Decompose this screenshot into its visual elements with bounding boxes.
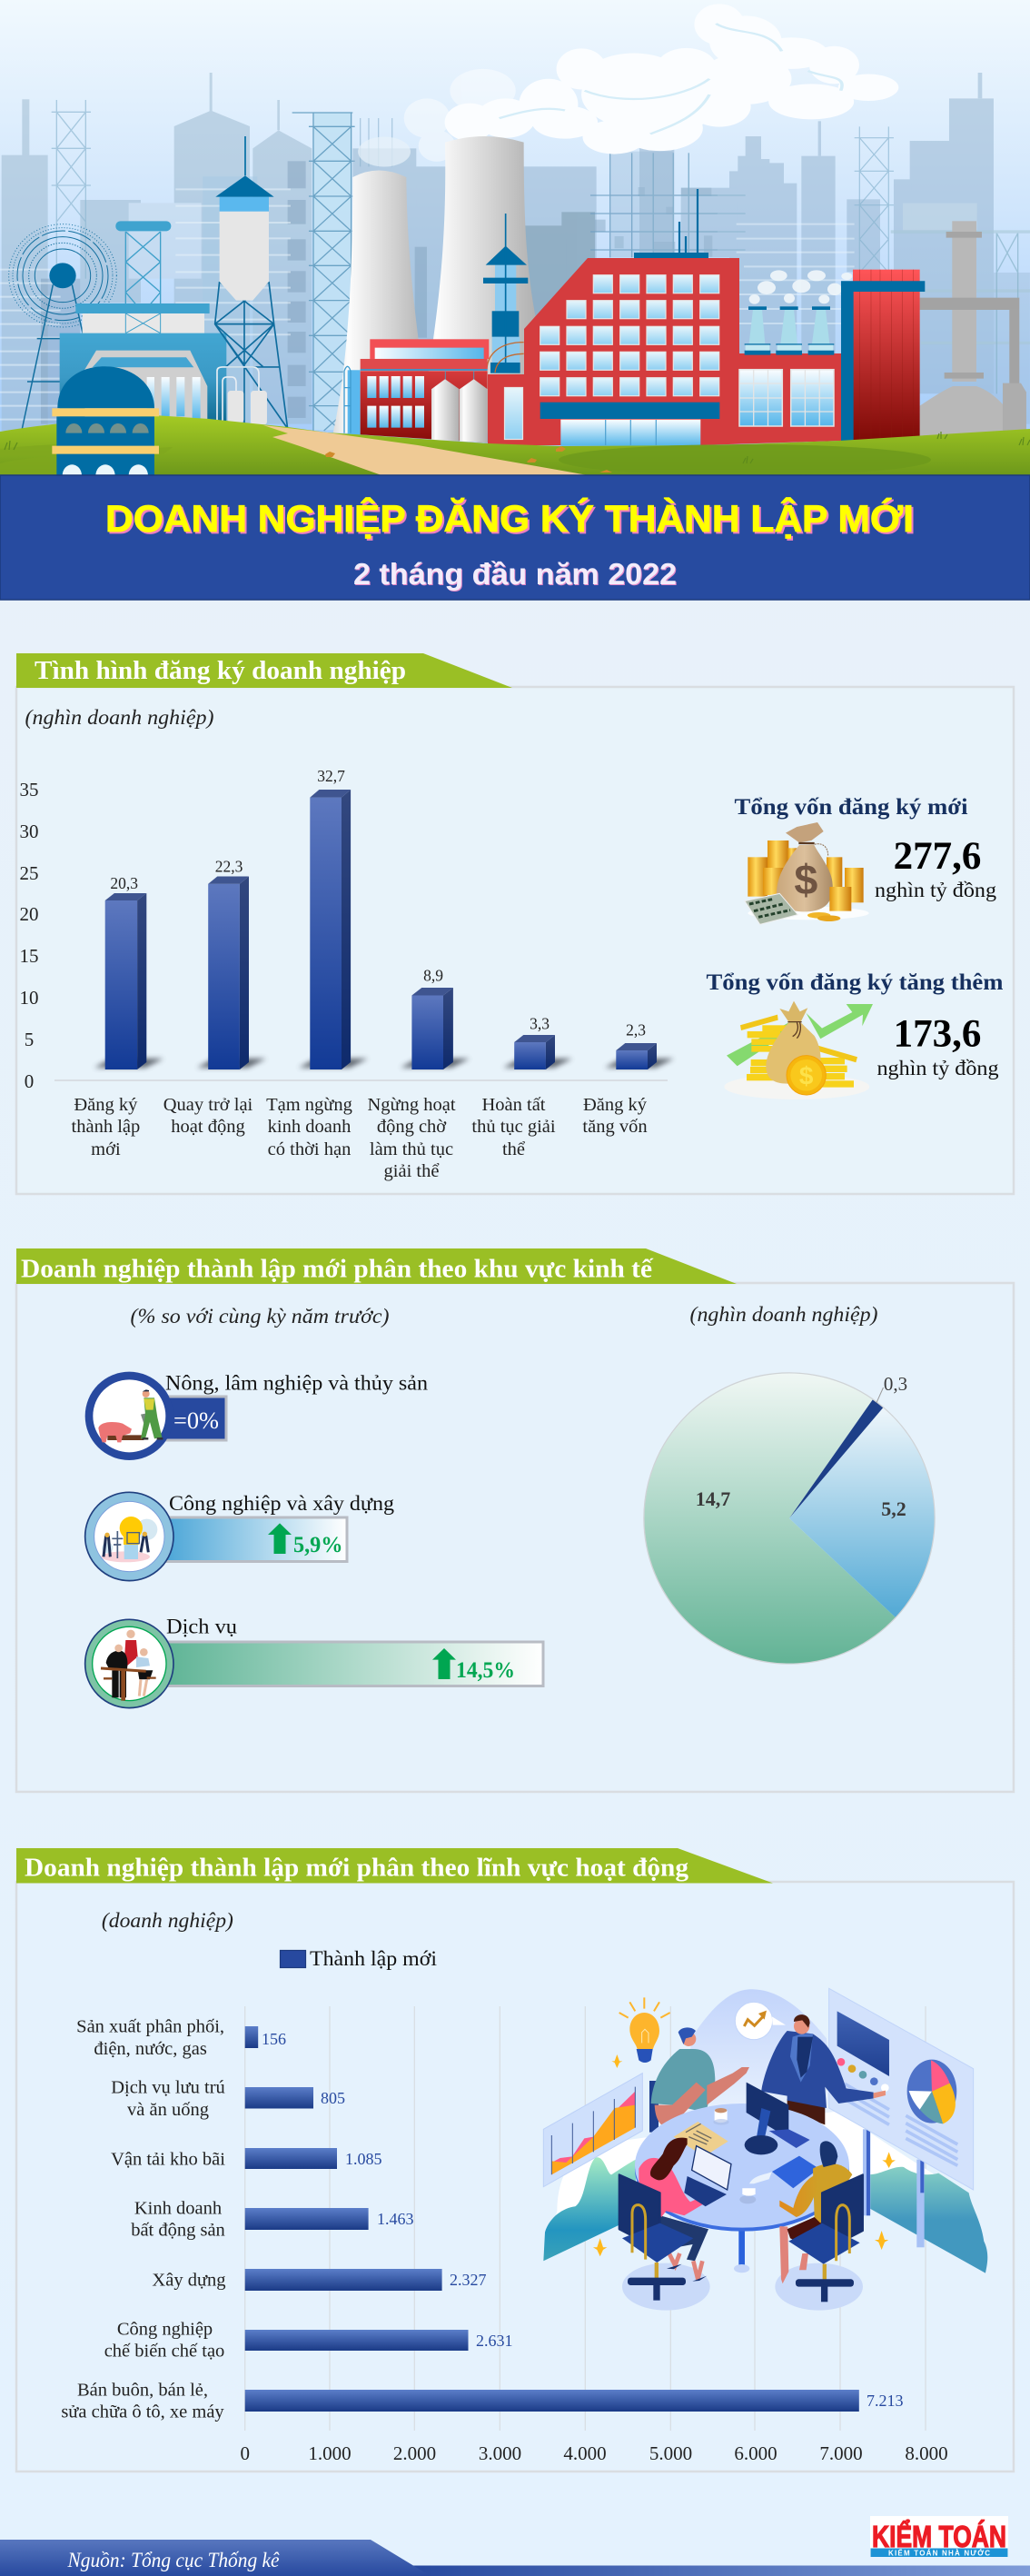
heading bbox=[16, 653, 512, 688]
slice: industry 5,2 bbox=[789, 1407, 935, 1617]
gray plant bbox=[920, 221, 1026, 438]
row: Dịch vụ lưu trú: 805 bbox=[321, 2089, 345, 2107]
man in blue suit bbox=[761, 2014, 886, 2124]
panel: by economic sector bbox=[16, 1248, 1014, 1792]
axis labels: 1.000 bbox=[308, 2442, 352, 2464]
row: Xây dựng: 2.327 bbox=[450, 2271, 487, 2289]
icon: business meeting bbox=[85, 1619, 173, 1708]
row: Sản xuất phân phối: Sản xuất phân phối, bbox=[76, 2017, 224, 2037]
cooling towers bbox=[333, 136, 539, 433]
note: percent comparison: (% so với cùng kỳ năm trước) bbox=[131, 1305, 389, 1328]
row: Bán buôn, bán lẻ: Bán buôn, bán lẻ, bbox=[77, 2381, 208, 2401]
row: industry and construction bbox=[85, 1492, 395, 1581]
unit: nghìn tỷ đồng bbox=[875, 879, 997, 901]
bar: Quay trở lại hoạt động: 22,3 bbox=[215, 858, 243, 876]
axis labels: 6.000 bbox=[734, 2442, 777, 2464]
row: Bán buôn, bán lẻ: 7.213 bbox=[867, 2392, 903, 2410]
left plant: tower, tank, building bbox=[9, 136, 288, 475]
small chimneys with smoke and right red tower bbox=[745, 221, 1026, 441]
category labels: tăng vốn bbox=[582, 1117, 648, 1137]
footer bbox=[0, 2516, 1030, 2576]
axis labels: 0 bbox=[240, 2442, 250, 2464]
unit note: (nghìn doanh nghiệp) bbox=[25, 706, 214, 729]
windows grid bbox=[505, 275, 719, 440]
heading: Tình hình đăng ký doanh nghiệp bbox=[35, 656, 406, 685]
domed observatory bbox=[52, 366, 159, 475]
row: Kinh doanh bất động sản bbox=[131, 2199, 414, 2241]
background skyline right bbox=[639, 73, 1030, 424]
water tower bbox=[215, 136, 288, 429]
lighthouse bbox=[483, 214, 528, 373]
y axis: 35 bbox=[20, 779, 38, 801]
illustration: business team meeting bbox=[543, 1988, 987, 2311]
stat: new registered capital: Tổng vốn đăng ký mới bbox=[734, 795, 968, 820]
mountains bbox=[543, 2157, 636, 2261]
row: Công nghiệp chế biến chế tạo: chế biến chế tạo bbox=[104, 2341, 224, 2361]
red plant, chimney and main building bbox=[344, 214, 528, 443]
y axis: 10 bbox=[20, 987, 38, 1009]
bar: Tạm ngừng kinh doanh bbox=[310, 767, 351, 1069]
smoke clouds bbox=[358, 4, 898, 166]
row: Công nghiệp chế biến chế tạo: 2.631 bbox=[476, 2332, 512, 2350]
bar: Ngừng hoạt động: 8,9 bbox=[423, 967, 443, 985]
value labels: 0,3 bbox=[884, 1373, 907, 1395]
woman in yellow and chair bbox=[775, 2141, 863, 2311]
y axis: 20 bbox=[20, 903, 38, 925]
category labels: Đăng ký bbox=[583, 1095, 648, 1115]
bar: Tạm ngừng kinh doanh: 32,7 bbox=[317, 767, 345, 785]
row: Xây dựng: Xây dựng bbox=[152, 2270, 226, 2290]
panel: by field of activity bbox=[16, 1848, 1014, 2472]
axis labels: 4.000 bbox=[563, 2442, 607, 2464]
stat: additional registered capital: Tổng vốn đăng ký tăng thêm bbox=[707, 970, 1004, 995]
category labels: mới bbox=[91, 1139, 121, 1159]
icon: money bag with coins: $ bbox=[794, 856, 817, 903]
small lattice bbox=[115, 221, 171, 333]
bar chart: registrations bbox=[20, 767, 674, 1181]
row: services bbox=[85, 1616, 543, 1708]
category labels: thể bbox=[502, 1139, 526, 1159]
bar: Quay trở lại hoạt động bbox=[208, 858, 249, 1069]
woman with laptop and chair bbox=[619, 2138, 731, 2311]
row: industry and construction: Công nghiệp và xây dựng bbox=[169, 1492, 395, 1515]
light bulb bbox=[619, 1997, 670, 2063]
row: agriculture: =0% bbox=[173, 1407, 219, 1434]
hero illustration: industrial skyline bbox=[0, 0, 1030, 475]
main title: DOANH NGHIỆP ĐĂNG KÝ THÀNH LẬP MỚI bbox=[105, 496, 914, 540]
unit note: (doanh nghiệp) bbox=[102, 1909, 233, 1932]
bar: Ngừng hoạt động bbox=[411, 967, 453, 1069]
background skyline centre bbox=[352, 118, 718, 424]
icon: up arrow bbox=[432, 1648, 456, 1679]
y axis: 5 bbox=[25, 1029, 34, 1050]
category labels: Tạm ngừng bbox=[266, 1095, 352, 1115]
axis labels: 2.000 bbox=[393, 2442, 436, 2464]
axis labels: 3.000 bbox=[479, 2442, 521, 2464]
category labels bbox=[72, 1095, 648, 1181]
axis labels: 5.000 bbox=[649, 2442, 692, 2464]
value labels: 14,7 bbox=[696, 1487, 730, 1510]
note: thousand firms: (nghìn doanh nghiệp) bbox=[690, 1303, 877, 1326]
category labels: giải thể bbox=[384, 1161, 440, 1181]
row: Sản xuất phân phối: điện, nước, gas bbox=[94, 2039, 207, 2059]
row: Bán buôn, bán lẻ bbox=[61, 2381, 903, 2422]
bar: Hoàn tất thủ tục giải thể: 3,3 bbox=[530, 1014, 550, 1032]
left red block bbox=[344, 339, 489, 443]
background skyline left bbox=[0, 73, 355, 431]
row: Kinh doanh bất động sản: Kinh doanh bbox=[134, 2199, 222, 2219]
stat: new registered capital bbox=[734, 795, 997, 924]
source ribbon bbox=[0, 2540, 431, 2576]
bar: Đăng ký tăng vốn bbox=[616, 1021, 657, 1069]
value: 277,6 bbox=[894, 835, 981, 878]
category labels: thủ tục giải bbox=[471, 1117, 556, 1137]
category labels: Đăng ký bbox=[74, 1095, 138, 1115]
icon: money bag with coins bbox=[745, 822, 869, 924]
speech bubble bbox=[735, 2002, 786, 2040]
slice: services 14,7 bbox=[645, 1374, 896, 1664]
value labels: 5,2 bbox=[881, 1497, 906, 1520]
bar: Đăng ký thành lập mới: 20,3 bbox=[110, 874, 138, 892]
row: services: 14,5% bbox=[456, 1658, 515, 1683]
row: Dịch vụ lưu trú: Dịch vụ lưu trú bbox=[111, 2077, 225, 2097]
panel: business registration bbox=[16, 653, 1014, 1194]
source text: Nguồn: Tổng cục Thống kê bbox=[67, 2549, 280, 2571]
bar shadows bbox=[94, 1059, 674, 1068]
stars bbox=[593, 2054, 896, 2256]
row: Công nghiệp chế biến chế tạo: Công nghiệp bbox=[117, 2319, 213, 2339]
category labels: kinh doanh bbox=[268, 1117, 351, 1137]
category labels: thành lập bbox=[72, 1117, 140, 1137]
main blue hall bbox=[60, 333, 226, 423]
presentation board bbox=[829, 1988, 974, 2247]
row: agriculture: Nông, lâm nghiệp và thủy sản bbox=[165, 1372, 429, 1394]
title banner bbox=[0, 475, 1030, 600]
row: Vận tải kho bãi bbox=[111, 2148, 381, 2170]
main red building bbox=[488, 189, 841, 446]
horizontal bar chart bbox=[61, 2006, 948, 2464]
y axis: 25 bbox=[20, 862, 38, 884]
tanks bbox=[217, 367, 267, 424]
logo: KIỂM TOÁN NHÀ NƯỚC bbox=[888, 2550, 990, 2557]
row: Dịch vụ lưu trú bbox=[111, 2077, 345, 2120]
category labels: làm thủ tục bbox=[370, 1139, 453, 1159]
axis labels bbox=[240, 2442, 948, 2464]
axis labels: 7.000 bbox=[819, 2442, 863, 2464]
radio mast bbox=[9, 224, 116, 475]
icon: up arrow bbox=[268, 1523, 292, 1554]
man in teal shirt bbox=[649, 2027, 749, 2133]
row: Sản xuất phân phối bbox=[76, 2017, 286, 2059]
category labels: Quay trở lại bbox=[163, 1095, 253, 1115]
category labels: Ngừng hoạt bbox=[367, 1095, 456, 1115]
row: services: Dịch vụ bbox=[166, 1616, 238, 1637]
mini pie bbox=[907, 2060, 956, 2123]
stat: additional registered capital bbox=[707, 970, 1004, 1099]
category labels: Hoàn tất bbox=[481, 1095, 546, 1115]
row: Kinh doanh bất động sản: 1.463 bbox=[377, 2210, 414, 2228]
y axis: 0 bbox=[25, 1070, 34, 1092]
icon: rising money bag: $ bbox=[799, 1061, 814, 1089]
bar: Hoàn tất thủ tục giải thể bbox=[514, 1014, 555, 1069]
round table bbox=[635, 2104, 849, 2273]
row: Vận tải kho bãi: Vận tải kho bãi bbox=[111, 2150, 225, 2170]
footer thin bar bbox=[413, 2566, 1030, 2576]
pie chart bbox=[644, 1373, 935, 1664]
category labels: hoạt động bbox=[171, 1117, 245, 1137]
value labels bbox=[696, 1373, 907, 1520]
icon: farmer and pig bbox=[85, 1372, 173, 1460]
row: Xây dựng bbox=[152, 2269, 487, 2291]
row: agriculture bbox=[85, 1372, 429, 1460]
heading: Doanh nghiệp thành lập mới phân theo lĩnh vực hoạt động bbox=[25, 1854, 688, 1883]
row: Dịch vụ lưu trú: và ăn uống bbox=[127, 2100, 209, 2120]
axis labels: 8.000 bbox=[905, 2442, 948, 2464]
category labels: động chờ bbox=[377, 1117, 447, 1137]
row: industry and construction: 5,9% bbox=[293, 1533, 343, 1557]
icon: rising money bag bbox=[724, 1001, 873, 1099]
heading: Doanh nghiệp thành lập mới phân theo khu vực kinh tế bbox=[21, 1254, 654, 1283]
legend: Thành lập mới bbox=[310, 1947, 437, 1970]
ground and road bbox=[0, 415, 1030, 475]
y axis: 15 bbox=[20, 945, 38, 967]
row: Vận tải kho bãi: 1.085 bbox=[345, 2150, 381, 2168]
unit: nghìn tỷ đồng bbox=[877, 1057, 999, 1079]
subtitle: 2 tháng đầu năm 2022 bbox=[353, 557, 677, 591]
row: Sản xuất phân phối: 156 bbox=[262, 2030, 286, 2048]
bar: Đăng ký thành lập mới bbox=[105, 874, 146, 1069]
slice: agriculture 0,3 bbox=[789, 1399, 883, 1518]
y axis bbox=[20, 779, 38, 1092]
icon: light bulb engineers bbox=[85, 1492, 173, 1581]
value: 173,6 bbox=[894, 1012, 981, 1056]
bar: Đăng ký tăng vốn: 2,3 bbox=[626, 1021, 646, 1039]
row: Bán buôn, bán lẻ: sửa chữa ô tô, xe máy bbox=[61, 2402, 224, 2422]
y axis: 30 bbox=[20, 821, 38, 842]
category labels: có thời hạn bbox=[268, 1139, 351, 1159]
desk items bbox=[674, 2083, 819, 2203]
floating chart bbox=[543, 2074, 642, 2187]
row: Kinh doanh bất động sản: bất động sản bbox=[131, 2221, 225, 2241]
row: Công nghiệp chế biến chế tạo bbox=[104, 2319, 512, 2361]
